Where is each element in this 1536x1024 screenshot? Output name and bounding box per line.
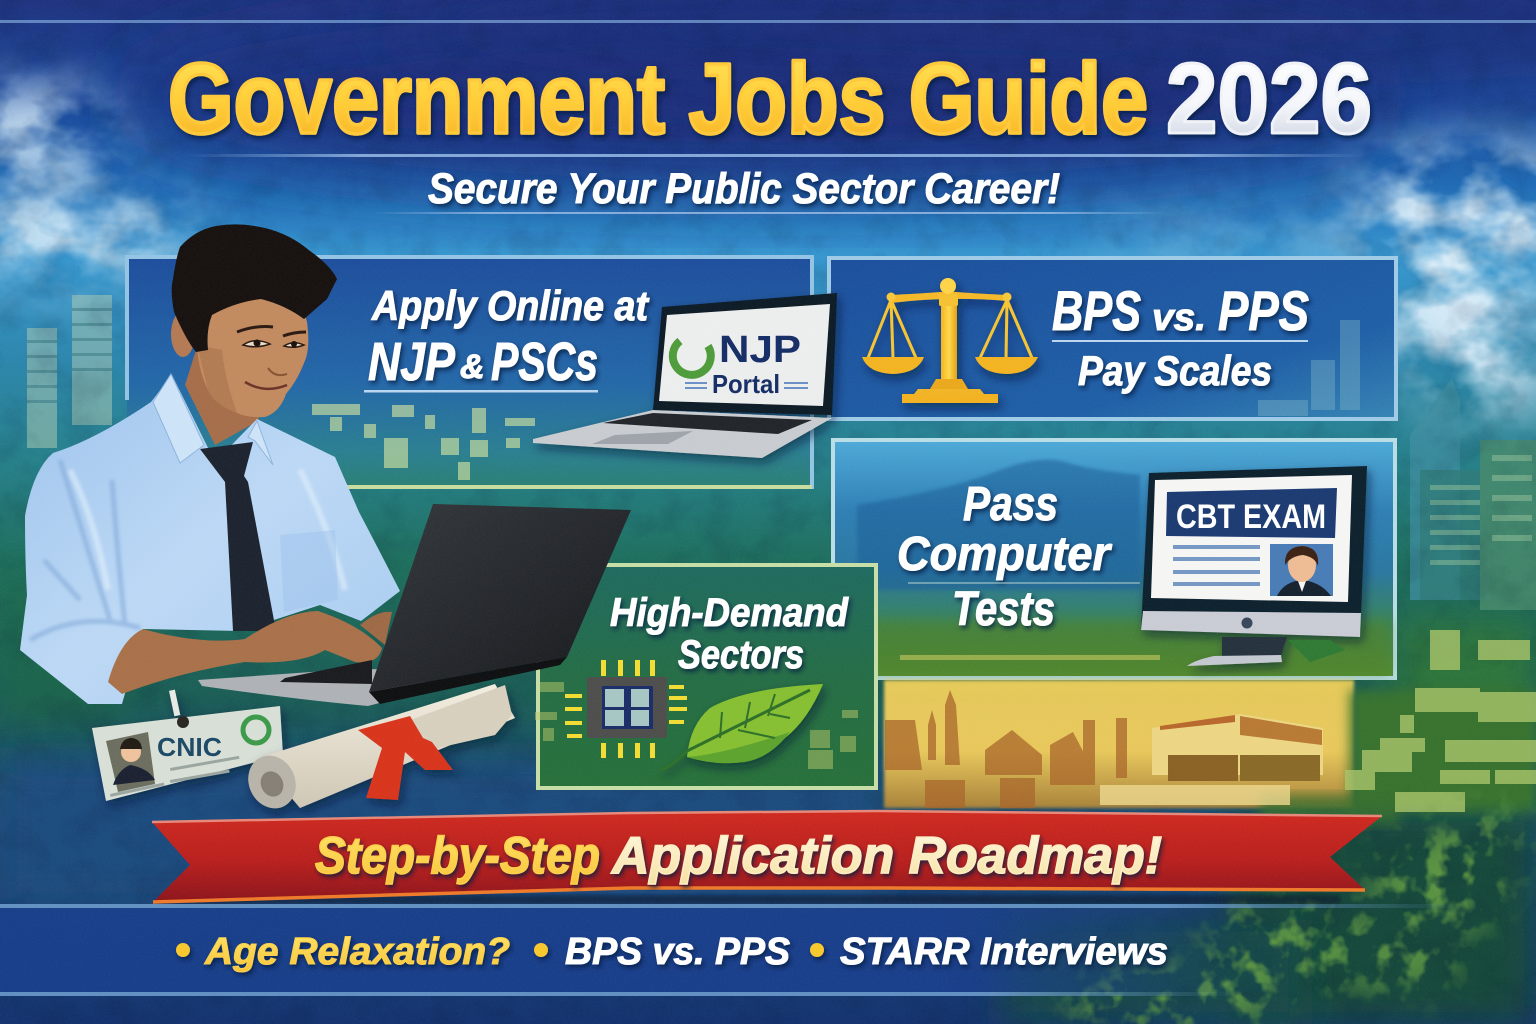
shirt sleeve folds	[30, 460, 140, 640]
top decorative rules	[0, 20, 1536, 214]
hair	[172, 224, 337, 352]
mini laptop with NJP portal: Portal	[712, 369, 780, 399]
bullet: STARR interviews: STARR Interviews	[840, 931, 1168, 973]
panel text: apply online: PSCs	[491, 332, 598, 392]
far hand	[360, 612, 392, 645]
icon: microchip	[565, 660, 687, 758]
panel text: apply online: &	[460, 348, 485, 386]
panel text: computer tests: Tests	[952, 583, 1055, 636]
panel text: pay scales: PPS	[1218, 279, 1309, 342]
panel text: pay scales: Pay Scales	[1078, 347, 1272, 394]
icon: desktop monitor CBT exam: CBT EXAM	[1176, 498, 1326, 536]
left city towers	[27, 295, 112, 448]
icon: balance scales	[862, 278, 1038, 403]
panel text: pay scales: BPS	[1052, 279, 1141, 342]
circuit tiles	[535, 682, 858, 769]
mini laptop with NJP portal: NJP	[719, 329, 801, 371]
red ribbon banner	[152, 811, 1382, 904]
city tile cluster	[312, 404, 535, 480]
right pixel tiles	[1260, 630, 1536, 825]
portal logo	[673, 341, 711, 375]
eyes, brows, nose and mouth	[237, 327, 306, 389]
diploma scroll with red ribbon	[240, 684, 515, 816]
panel text: sectors	[610, 591, 849, 677]
banner text	[315, 827, 1162, 885]
panel text: computer tests: Computer	[897, 528, 1112, 581]
shirt pocket	[280, 530, 338, 612]
panel: apply online	[127, 257, 812, 487]
golden town landscape	[884, 630, 1536, 825]
panel text: sectors: High-Demand	[610, 591, 849, 635]
panel: pay scales	[829, 258, 1396, 419]
civic building	[1100, 714, 1323, 805]
neck	[185, 350, 262, 445]
lanyard and CNIC card	[92, 690, 283, 801]
banner text: Step-by-Step	[315, 827, 600, 885]
panel text: pay scales	[1052, 279, 1309, 394]
title: Government Jobs Guide	[168, 43, 1148, 155]
forearm and hand	[108, 611, 382, 694]
laptop	[198, 504, 631, 706]
panel text: computer tests	[897, 478, 1112, 636]
panel text: computer tests: Pass	[963, 478, 1058, 531]
panel text: apply online	[368, 282, 650, 392]
faint buildings	[1258, 320, 1360, 416]
cheek shading	[197, 345, 237, 413]
mini laptop with NJP portal	[533, 293, 837, 458]
leaves under monitor	[1288, 640, 1345, 662]
panel text: sectors: Sectors	[678, 633, 804, 677]
panel text: apply online: NJP	[368, 332, 456, 392]
subtitle: Secure Your Public Sector Career!	[428, 165, 1060, 213]
lanyard and CNIC card: CNIC	[157, 732, 222, 762]
right city towers	[1410, 378, 1536, 610]
panel: computer tests	[833, 440, 1395, 678]
banner text: Application Roadmap!	[610, 827, 1162, 885]
icon: green leaf	[660, 684, 823, 771]
shirt	[20, 375, 400, 704]
mountains and hill town	[857, 460, 1140, 590]
icon: desktop monitor CBT exam	[1141, 466, 1367, 666]
face	[197, 298, 308, 417]
panel text: pay scales: vs.	[1152, 297, 1206, 339]
town silhouette	[885, 690, 1127, 808]
bullet: BPS vs PPS: BPS vs. PPS	[565, 931, 790, 973]
bottom bullet strip	[0, 904, 1460, 996]
tie	[200, 442, 276, 631]
title: 2026	[1166, 43, 1372, 155]
person working at laptop	[20, 224, 631, 706]
collar	[153, 374, 273, 465]
panel: high-demand sectors	[535, 565, 876, 788]
bullet: age relaxation: Age Relaxation?	[204, 931, 510, 973]
ear	[171, 311, 195, 357]
right foliage	[1060, 810, 1530, 1024]
panel text: apply online: Apply Online at	[371, 282, 650, 329]
